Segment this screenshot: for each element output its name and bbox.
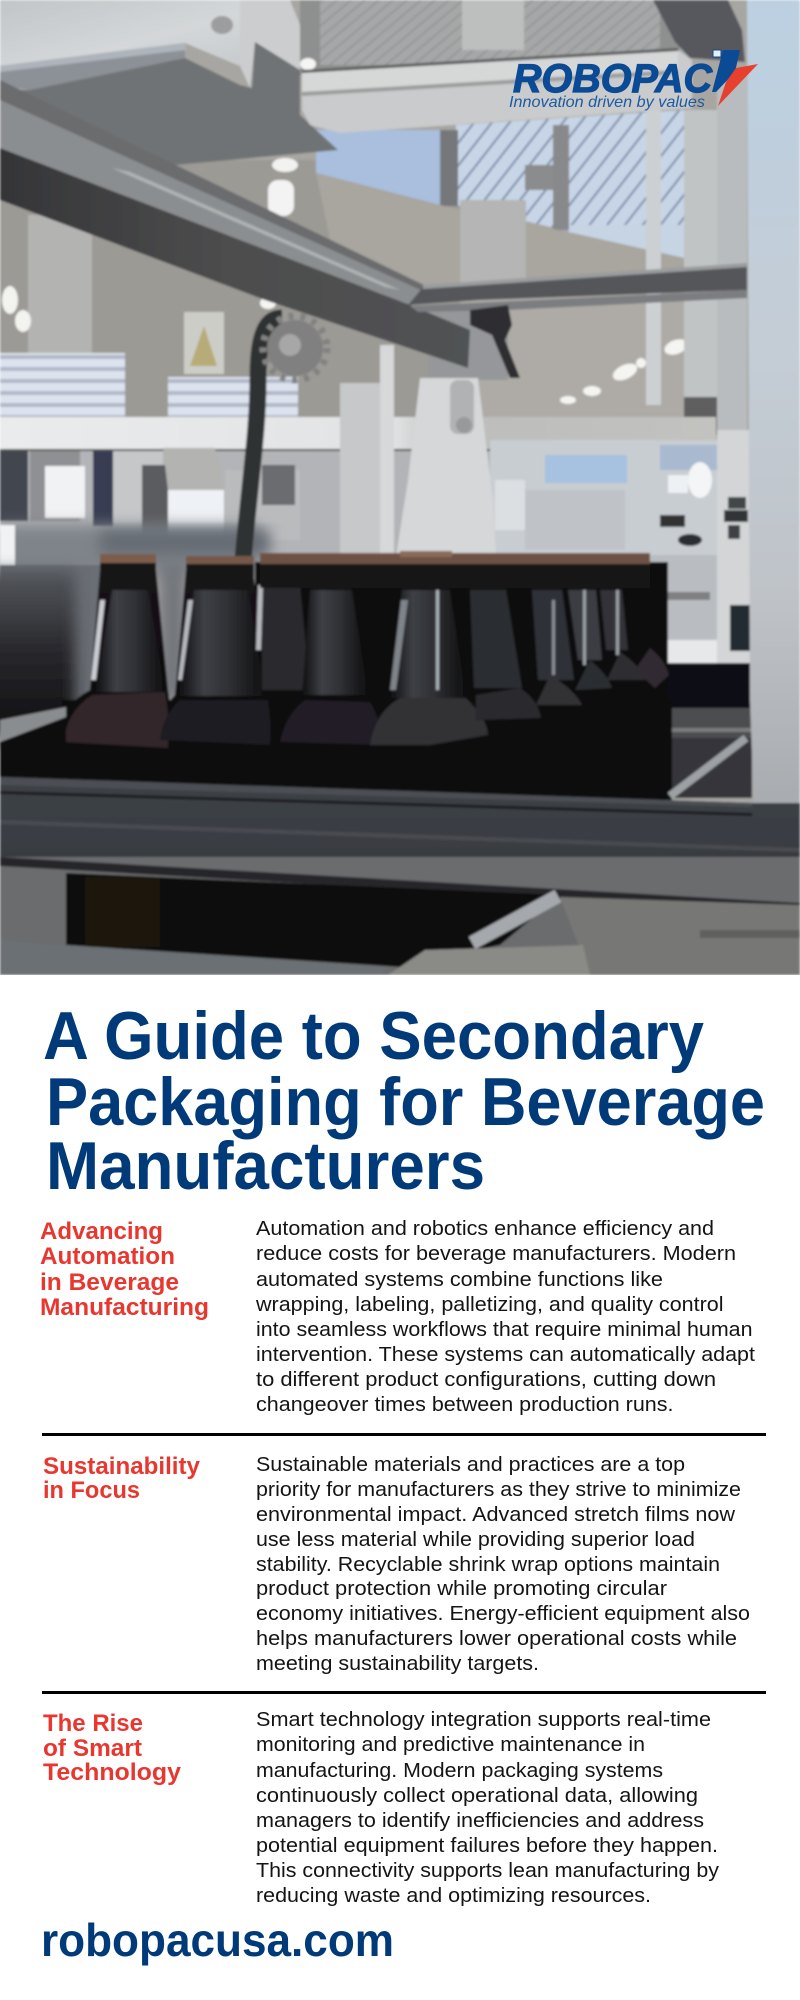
horizontal beam [408, 265, 747, 305]
text block: automation: wrapping, labeling, palletizing, and quality control [255, 1293, 724, 1316]
pillars [460, 200, 526, 290]
top-left bracket [0, 0, 240, 66]
logo tagline: Innovation driven by values [509, 94, 705, 111]
text block: sustainability: helps manufacturers lower operational costs while [256, 1627, 737, 1650]
black block and rails right [666, 662, 752, 710]
text block: automation: reduce costs for beverage manufacturers. Modern [256, 1242, 736, 1265]
bottle caps [100, 554, 156, 563]
text block: automation: into seamless workflows that require minimal human [256, 1318, 752, 1341]
sprocket [267, 320, 323, 376]
handle [470, 305, 520, 378]
bottle necks highlights [95, 590, 165, 692]
text block: sustainability: meeting sustainability targets. [256, 1652, 539, 1675]
photo: bottles on packaging line [0, 0, 800, 975]
heading: Advancing Automation: Advancing [40, 1218, 163, 1245]
floor left [68, 943, 218, 953]
bottles [252, 560, 670, 702]
second column [684, 110, 717, 398]
title: A Guide to Secondary [43, 998, 704, 1074]
factory below band [0, 450, 490, 554]
logo wordmark: ROBOPAC [513, 57, 713, 101]
title [43, 998, 765, 1204]
heading: Advancing Automation: in Beverage [40, 1269, 179, 1296]
website url: robopacusa.com [41, 1914, 394, 1966]
heading: Advancing Automation [40, 1218, 209, 1321]
heading: Sustainability in Focus: Sustainability [43, 1453, 200, 1480]
machine column [340, 383, 380, 558]
text block: smart technology [256, 1708, 720, 1907]
heading: Sustainability in Focus: in Focus [43, 1477, 140, 1504]
dark top right [653, 0, 745, 62]
side rail left [0, 707, 66, 742]
chrome rail floor [472, 896, 558, 943]
heading: The Rise of Smart Technology: Technology [43, 1759, 181, 1786]
front rail [0, 775, 800, 859]
text block: automation: Automation and robotics enhance efficiency and [256, 1217, 714, 1240]
text block: sustainability: Sustainable materials and practices are a top [256, 1453, 685, 1476]
left window stripes [0, 353, 125, 417]
text block: automation [255, 1217, 755, 1416]
chain [243, 318, 282, 560]
heading: Advancing Automation: Automation [40, 1243, 175, 1270]
sign [184, 312, 224, 374]
diagonal beam [0, 100, 420, 304]
heading: Advancing Automation: Manufacturing [40, 1294, 209, 1321]
text block: smart technology: reducing waste and optimizing resources. [256, 1884, 651, 1907]
centre background right [488, 440, 718, 556]
lintel [302, 50, 692, 133]
text block: smart technology: monitoring and predictive maintenance in [256, 1733, 645, 1756]
right pillar [747, 0, 800, 853]
clamp plate [396, 378, 496, 556]
text block: smart technology: Smart technology integration supports real-time [256, 1708, 711, 1731]
ceiling lights [272, 158, 298, 172]
chrome diagonal right [670, 738, 746, 796]
text block: automation: intervention. These systems can automatically adapt [256, 1343, 755, 1366]
text block: smart technology: manufacturing. Modern packaging systems [256, 1759, 663, 1782]
text block: sustainability: stability. Recyclable shrink wrap options maintain [256, 1553, 720, 1576]
heading: Sustainability in Focus [43, 1453, 200, 1504]
text block: automation: to different product configurations, cutting down [256, 1368, 716, 1391]
floor block [388, 945, 590, 975]
text block: sustainability: economy initiatives. Energy-efficient equipment also [256, 1602, 750, 1625]
text block: sustainability: priority for manufacturers as they strive to minimize [256, 1478, 741, 1501]
title: Packaging for Beverage [46, 1064, 765, 1140]
left blurred dark bottle [0, 564, 102, 702]
text block: smart technology: managers to identify inefficiencies and address [256, 1809, 704, 1832]
logo: Robopac [509, 50, 758, 111]
text block: sustainability: use less material while providing superior load [256, 1528, 695, 1551]
text block: smart technology: potential equipment failures before they happen. [256, 1834, 718, 1857]
text block: sustainability: product protection while promoting circular [256, 1577, 667, 1600]
floor right [560, 897, 800, 975]
below rail [6, 856, 800, 904]
blue windows [316, 130, 440, 205]
text block: sustainability [256, 1453, 750, 1675]
background wall [3, 0, 755, 804]
white band [0, 417, 716, 450]
roof top [300, 0, 680, 75]
reflection bottles [66, 873, 560, 967]
title: Manufacturers [46, 1128, 485, 1204]
heading: The Rise of Smart Technology [43, 1710, 181, 1786]
text block: smart technology: continuously collect operational data, allowing [256, 1784, 698, 1807]
text block: smart technology: This connectivity supports lean manufacturing by [256, 1859, 720, 1882]
heading: The Rise of Smart Technology: of Smart [43, 1735, 142, 1762]
logo mark [712, 50, 758, 106]
text block: automation: changeover times between production runs. [256, 1393, 674, 1416]
bottle shoulders [64, 692, 169, 748]
text block: sustainability: environmental impact. Advanced stretch films now [256, 1503, 735, 1526]
heading: The Rise of Smart Technology: The Rise [43, 1710, 143, 1737]
arm hub [458, 310, 509, 380]
text block: automation: automated systems combine functions like [256, 1268, 663, 1291]
